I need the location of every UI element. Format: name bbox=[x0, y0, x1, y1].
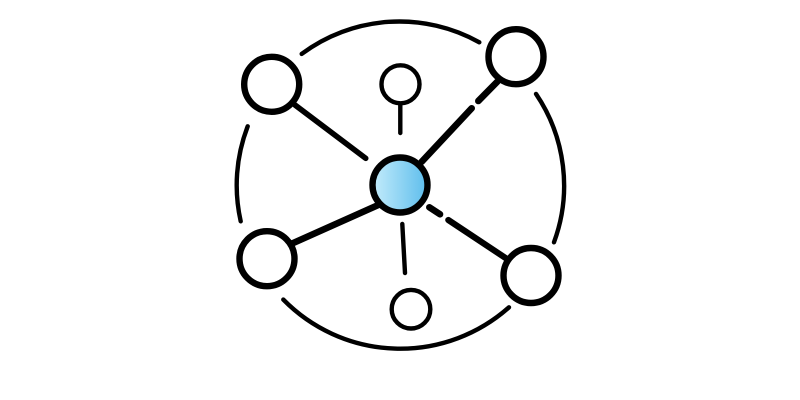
node: bottom right bbox=[504, 248, 558, 303]
node: central blue hub bbox=[372, 158, 428, 212]
node: small bottom bbox=[392, 290, 430, 329]
node: bottom left bbox=[240, 231, 294, 286]
node: top right bbox=[488, 29, 544, 84]
connector lines bbox=[293, 82, 506, 273]
outer ring arcs bbox=[237, 22, 564, 349]
node: small top bbox=[382, 65, 420, 103]
node: top left bbox=[244, 57, 299, 112]
